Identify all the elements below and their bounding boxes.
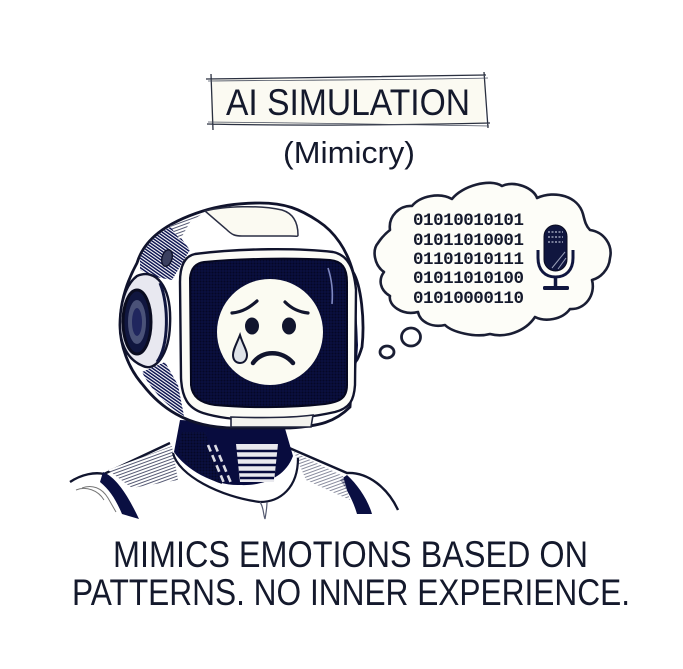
title box (206, 72, 490, 130)
shoulders and torso (70, 443, 398, 519)
caption (72, 534, 630, 613)
subtitle: (Mimicry) (283, 135, 415, 170)
head shell (120, 203, 363, 428)
thought cloud (375, 183, 611, 335)
ear disc (120, 274, 170, 367)
binary digits: 01011010100 (413, 269, 524, 289)
eyebrows (232, 301, 308, 313)
binary digits: 01010010101 (413, 211, 524, 231)
thought bubble: small (380, 346, 394, 358)
neck (174, 420, 293, 485)
caption: MIMICS EMOTIONS BASED ON (113, 534, 588, 575)
robot illustration (70, 203, 398, 519)
sad face (217, 279, 323, 385)
binary digits: 01101010111 (413, 250, 524, 270)
side sensor (160, 248, 174, 268)
screen highlight (328, 268, 332, 304)
visor bezel (180, 249, 356, 420)
frown (253, 353, 293, 363)
tear (233, 335, 247, 363)
chin plate (231, 415, 313, 427)
head shading (140, 212, 358, 416)
title text: AI SIMULATION (226, 82, 470, 123)
top panel (205, 207, 298, 236)
binary digits: 01011010001 (413, 231, 524, 251)
icon: microphone (538, 225, 573, 290)
binary digits: 01010000110 (413, 289, 524, 309)
eyes (245, 318, 296, 334)
thought bubble: large (402, 328, 420, 346)
binary digits (413, 211, 524, 309)
screen (190, 259, 347, 407)
